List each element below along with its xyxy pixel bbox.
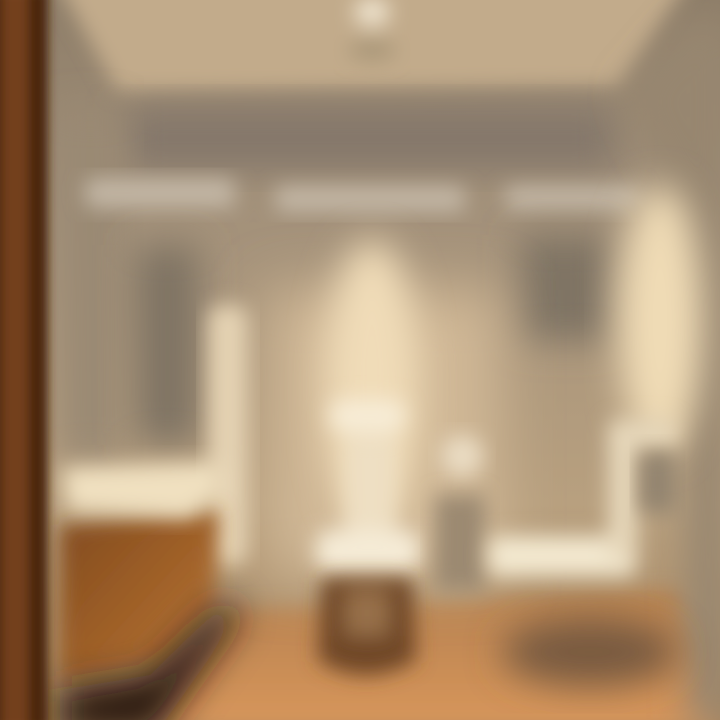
right wall (625, 20, 720, 720)
pale blurred wall lettering (85, 178, 640, 212)
dark floor corner (60, 600, 240, 720)
floor (150, 590, 720, 720)
bathtub edge (488, 420, 676, 576)
upper wall band (125, 108, 615, 168)
tub side (640, 452, 675, 512)
ceiling (50, 0, 695, 92)
left wall (60, 110, 120, 460)
vanity cabinet (60, 510, 218, 680)
ceiling lamp (348, 0, 396, 60)
central glow (324, 240, 420, 530)
wall fixture (441, 435, 483, 477)
dark pedestal (435, 495, 485, 590)
dark wall patches (135, 235, 610, 445)
basket (318, 578, 416, 675)
tall bright towel (618, 185, 702, 455)
left vertical panel (208, 305, 248, 565)
vanity countertop (62, 462, 224, 518)
door frame (0, 0, 48, 720)
toilet (316, 400, 420, 572)
wide warm glow (270, 290, 500, 580)
bath rug (502, 618, 678, 686)
